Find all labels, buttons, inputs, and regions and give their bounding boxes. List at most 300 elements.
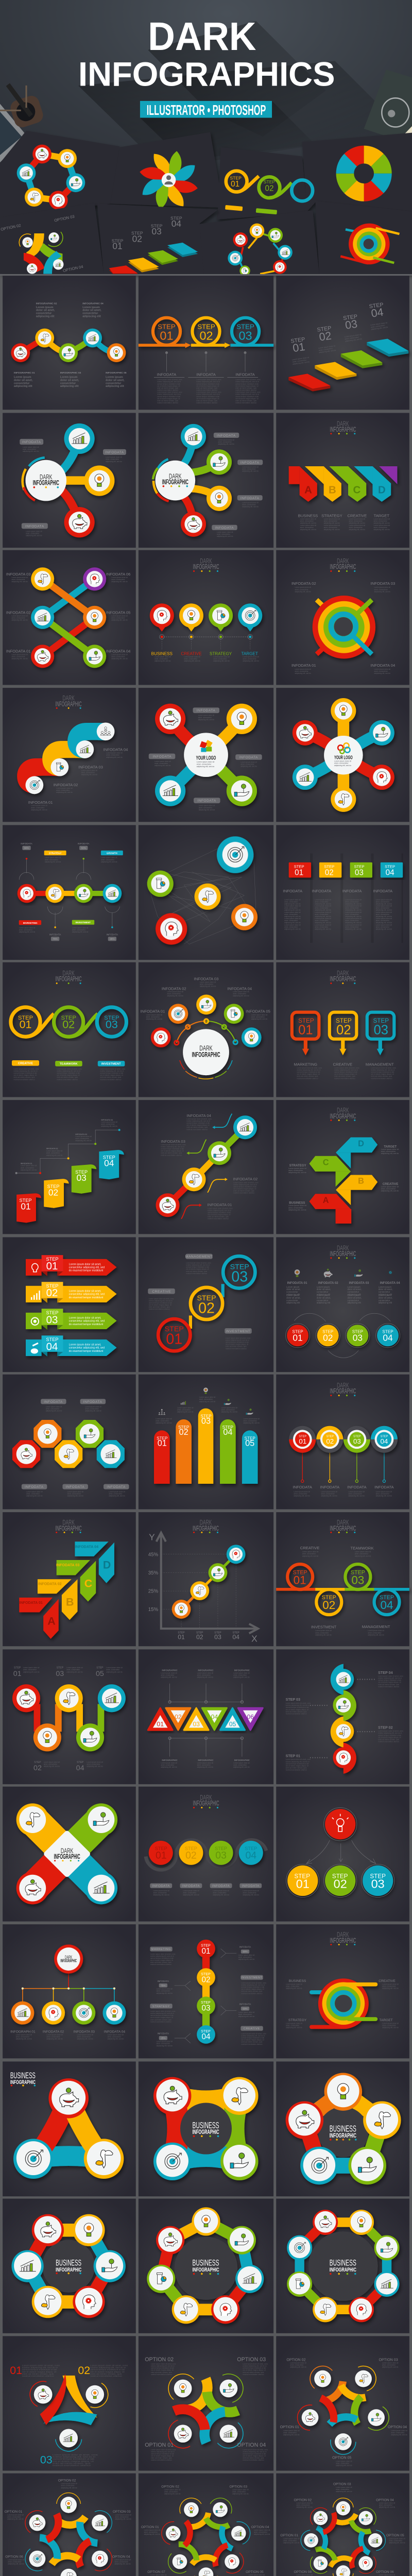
panel: four balls with curved arrows: 01 <box>293 1332 303 1343</box>
labels <box>294 1062 396 1079</box>
step labels: 04 <box>370 306 384 320</box>
hub title: INFOGRAPHIC <box>33 479 59 487</box>
panel: vertical crescents <box>276 1649 409 1784</box>
mockup: steps: STEP <box>112 238 124 243</box>
labels <box>288 1145 399 1211</box>
rings <box>310 1978 377 2029</box>
subtitle banner: ILLUSTRATOR • PHOTOSHOP <box>147 102 266 118</box>
bar icons <box>158 1387 253 1415</box>
pills: MANAGEMENT <box>185 1255 213 1259</box>
step numbers: 03 <box>374 1023 388 1038</box>
axis labels: 35% <box>148 1570 159 1576</box>
callouts: INFODATA <box>49 934 61 936</box>
letters: INFODATA 04 <box>75 1545 98 1549</box>
hub title: DARK <box>169 472 182 480</box>
labels: OPTION 01 <box>145 2442 174 2448</box>
arrow text: 01 <box>46 1261 58 1272</box>
top title <box>60 1955 77 1963</box>
step numbers: STEP <box>298 1018 314 1024</box>
panel: folded arrows <box>276 1100 409 1234</box>
labels: OPTION 04 <box>251 2526 269 2529</box>
pills and percent labels: INFODATA <box>239 1946 251 1948</box>
mockup: ribbons and discs: OPTION 04 <box>62 264 84 273</box>
panel: octagons <box>3 1375 136 1509</box>
heading: INFOGRAPHIC <box>330 975 356 982</box>
labels: STRATEGY <box>210 651 232 656</box>
pills: INFODATA <box>239 756 258 759</box>
ribbons <box>289 466 397 502</box>
connector stairs: INFODATA 03 <box>75 1133 87 1136</box>
step text: STEP <box>245 1436 255 1440</box>
labels: STEP <box>96 1667 104 1670</box>
pills <box>148 1254 252 1350</box>
heading: INFOGRAPHIC <box>193 1524 219 1532</box>
labels: OPTION 05 <box>386 2534 404 2537</box>
heading: DARK <box>337 1381 349 1389</box>
hub title <box>192 1044 220 1058</box>
arrow text <box>46 1257 59 1352</box>
labels: INFODATA 03 <box>349 1281 369 1285</box>
labels: INFOGRAPHIC <box>234 1669 250 1671</box>
labels <box>286 1671 403 1771</box>
step numbers: 01 <box>20 1018 31 1030</box>
stems <box>301 1453 385 1482</box>
panel: four tags with columns: 04 <box>386 868 394 877</box>
letters: INFODATA 02 <box>38 1582 62 1586</box>
labels: BUSINESS <box>298 513 318 518</box>
labels: OPTION 02 <box>286 2358 306 2362</box>
mockup: pinwheel <box>139 150 198 210</box>
panel: ribbon tags stairs <box>3 1100 136 1234</box>
labels: INFOGRAPH 01 <box>10 2030 36 2033</box>
panel: four balls with curved arrows: STEP <box>292 1330 303 1334</box>
panel: three blade cycle <box>3 2336 136 2471</box>
arrow text: 04 <box>46 1341 58 1352</box>
panel: idea tree: 02 <box>334 1877 347 1891</box>
balls <box>149 1841 263 1865</box>
long shadows of title <box>78 21 410 168</box>
heading: INFOGRAPHIC <box>330 1937 356 1944</box>
rings <box>11 1007 126 1037</box>
idea bulb <box>332 1814 349 1832</box>
panel: four balls with curved arrows: STEP <box>382 1330 393 1334</box>
panel: half rings with stems: STEP <box>299 1435 306 1438</box>
labels: INFODATA 01 <box>287 1281 307 1285</box>
title: DARK <box>61 1847 74 1855</box>
discs <box>174 2380 237 2443</box>
step text: 03 <box>201 1417 211 1426</box>
info columns <box>154 351 261 404</box>
heading: INFOGRAPHIC <box>56 975 82 982</box>
letters <box>20 1545 111 1627</box>
pills: INFODATA <box>152 1885 170 1888</box>
step plates <box>288 339 408 392</box>
pins <box>150 603 262 632</box>
panel: idea tree: STEP <box>294 1873 310 1879</box>
heading: DARK <box>62 969 75 977</box>
step numbers: STEP <box>158 323 176 331</box>
panel: four balls on wave: STEP <box>155 1846 167 1851</box>
labels: OPTION 01 <box>141 2526 159 2529</box>
panel: four tags with columns: STEP <box>324 865 334 869</box>
panel: business square <box>139 2061 273 2196</box>
labels <box>291 581 396 674</box>
labels: INFODATA <box>320 1485 340 1489</box>
letters: D <box>378 485 386 496</box>
pills and percent labels: MARKETING <box>151 1948 171 1951</box>
cycle arcs <box>21 2492 117 2576</box>
heading <box>193 557 219 572</box>
pills: INFODATA <box>44 1400 63 1404</box>
labels <box>5 2479 131 2576</box>
discs <box>302 2370 385 2450</box>
pills: INFODATA <box>217 434 236 437</box>
labels <box>141 976 270 1020</box>
callouts: INFODATA <box>78 842 90 845</box>
step numbers: 02 <box>322 1599 335 1612</box>
labels: STEP <box>34 1761 41 1764</box>
step numbers: 03 <box>231 1269 248 1285</box>
heading <box>56 1519 82 1533</box>
labels: TEAMWORK <box>351 1546 374 1551</box>
block of rows 1-3 <box>3 276 409 685</box>
heading <box>193 1793 219 1808</box>
mockup: step rings <box>225 171 313 214</box>
center title: BUSINESS <box>192 2259 219 2268</box>
labels <box>286 1979 399 2029</box>
labels <box>145 2357 268 2461</box>
pills: INFODATA <box>212 1885 230 1888</box>
pills and percent labels: INVESTMENT <box>241 1976 262 1979</box>
step numbers: STEP <box>230 1263 249 1272</box>
callouts: 75% <box>53 938 58 940</box>
labels: OPTION 06 <box>5 2555 23 2558</box>
labels: CREATIVE <box>383 1182 398 1186</box>
labels: OPTION 02 <box>58 2479 76 2483</box>
step text <box>157 1414 255 1448</box>
axis labels: 25% <box>148 1589 159 1595</box>
pills <box>20 439 126 537</box>
letters: INFODATA 01 <box>20 1601 43 1605</box>
letters: A <box>323 1196 329 1205</box>
metaball triangle <box>13 2078 124 2179</box>
step numbers: 03 <box>351 1573 364 1586</box>
hub title: INFOGRAPHIC <box>162 478 188 486</box>
letters: D <box>103 1558 111 1571</box>
info columns: INFODATA <box>196 372 216 377</box>
panel: four balls on wave: 04 <box>245 1850 256 1861</box>
labels: OPTION 01 <box>5 2510 23 2514</box>
panel: four balls with curved arrows: STEP <box>352 1330 364 1334</box>
panel: business pentagon <box>276 2061 409 2196</box>
pills: INFODATA <box>25 524 44 528</box>
labels <box>298 513 390 531</box>
callouts: MARKETING <box>23 922 38 924</box>
subtitle banner <box>140 101 272 118</box>
metaball hexagon <box>11 2214 126 2318</box>
panel: your logo with six branches <box>276 688 409 822</box>
center title: INFOGRAPHIC <box>192 2129 219 2136</box>
heading <box>193 1519 219 1533</box>
mockup sheets bottom row <box>0 201 412 274</box>
pills and percent labels <box>150 1946 266 2047</box>
panel: vertical step balls: 03 <box>201 2004 211 2012</box>
heading <box>330 1244 356 1259</box>
wave <box>146 1840 266 1870</box>
labels: OPTION 04 <box>376 2498 394 2502</box>
heading: DARK <box>200 557 212 565</box>
center title: BUSINESS <box>56 2259 81 2268</box>
heading: INFOGRAPHIC <box>330 426 356 433</box>
info columns: INFODATA <box>157 372 177 377</box>
panel: vertical step balls: 01 <box>201 1947 211 1956</box>
labels: INFODATA 03 <box>161 1139 185 1144</box>
ribbon tags <box>16 1150 124 1223</box>
pills: INFODATA <box>197 709 215 713</box>
heading <box>330 557 356 572</box>
staircase <box>17 722 114 794</box>
metaball pentagon <box>286 2073 401 2184</box>
panel: hub with four branches <box>139 413 273 548</box>
parallelograms and arrows <box>19 1541 114 1639</box>
panel: your logo with four branches <box>139 688 273 822</box>
discs <box>166 2502 246 2576</box>
labels: INFODATA 02 <box>318 1281 338 1285</box>
letters: B <box>358 1176 364 1185</box>
panel: four tags with columns <box>276 825 409 960</box>
labels: CREATIVE <box>348 513 367 518</box>
labels <box>141 2485 270 2576</box>
panel: X shape <box>3 1787 136 1921</box>
heading: DARK <box>62 1519 75 1527</box>
heading: DARK <box>337 1519 349 1527</box>
labels: TARGET <box>374 513 389 518</box>
heading: INFOGRAPHIC <box>10 2079 36 2086</box>
pills: INFODATA <box>22 440 41 444</box>
callouts <box>19 842 123 941</box>
step text: STEP <box>178 1425 190 1430</box>
step numbers: STEP <box>165 1325 184 1333</box>
labels: 04 <box>76 1764 84 1772</box>
mockup: steps: 01 <box>112 241 123 251</box>
center title <box>330 2124 357 2141</box>
labels <box>161 1669 250 1768</box>
blades <box>315 2379 373 2435</box>
step numbers: STEP <box>18 1015 33 1021</box>
panel: vertical step balls: 02 <box>201 1975 211 1984</box>
axis labels: 01 <box>178 1634 185 1641</box>
panel: four tags with columns: STEP <box>385 865 395 869</box>
heading <box>330 1519 356 1533</box>
blades <box>29 2374 97 2445</box>
pills: INFODATA <box>242 1885 260 1888</box>
title <box>54 1847 80 1861</box>
logo: YOUR LOGO <box>196 755 216 761</box>
labels: OPTION 04 <box>237 2442 266 2448</box>
chart nodes <box>172 1545 246 1619</box>
logo <box>196 740 216 768</box>
labels: INFOGRAPHIC <box>162 1669 178 1671</box>
arrow text: 02 <box>46 1287 58 1299</box>
step numbers: STEP <box>373 1018 389 1024</box>
axis labels: STEP <box>178 1631 185 1634</box>
labels <box>286 1281 400 1304</box>
block of rows 13-14 <box>3 1924 409 2196</box>
labels: INFODATA <box>293 1485 313 1489</box>
axes <box>157 1533 258 1633</box>
step numbers <box>293 1570 394 1612</box>
panel: four balls on wave <box>139 1787 273 1921</box>
labels: INFODATA 03 <box>371 581 395 586</box>
center title: INFOGRAPHIC <box>192 2267 219 2273</box>
step text: 04 <box>211 1714 218 1721</box>
arrow text: STEP <box>46 1283 59 1289</box>
panel: idea tree: 01 <box>296 1877 310 1891</box>
labels: INFODATA 02 <box>291 581 316 586</box>
connector stairs: INFODATA 02 <box>46 1148 58 1150</box>
labels: INFODATA 04 <box>371 663 396 668</box>
mockup: steps: 04 <box>171 218 181 229</box>
panel: ribbon staircase <box>3 688 136 822</box>
pills and percent labels: 25% <box>161 2037 165 2040</box>
labels <box>151 651 258 656</box>
step text: 02 <box>175 1714 182 1721</box>
mockup: step rings: 02 <box>265 184 273 193</box>
panel: four balls on wave: STEP <box>215 1846 227 1851</box>
metaball octagon <box>287 2210 400 2322</box>
labels: OPTION 01 <box>280 2534 298 2537</box>
bottom arcs <box>180 1060 232 1079</box>
heading: INFOGRAPHIC <box>330 1250 356 1258</box>
panel: four tags with columns: STEP <box>354 865 364 869</box>
step numbers: 02 <box>336 1023 351 1038</box>
labels: 03 <box>40 2453 53 2466</box>
labels: 01 <box>13 1670 22 1678</box>
heading <box>330 969 356 984</box>
balls <box>286 1808 394 1897</box>
block of rows 15-17 <box>3 2199 409 2576</box>
labels: MANAGEMENT <box>366 1062 394 1066</box>
panel: vertical step balls: STEP <box>201 2029 211 2033</box>
panel: triangles row <box>139 1649 273 1784</box>
hub title <box>33 473 59 488</box>
pills: INFODATA <box>182 1885 200 1888</box>
labels: STEP 04 <box>378 1671 393 1675</box>
panel: four blade cycle <box>139 2336 273 2471</box>
labels <box>13 1667 104 1772</box>
panel: vertical step balls: STEP <box>201 1972 211 1976</box>
letters: C <box>84 1578 92 1590</box>
blades <box>174 2510 237 2573</box>
logo <box>334 743 353 767</box>
labels: OPTION 03 <box>333 2483 351 2486</box>
panel: four tags with columns: STEP <box>294 865 304 869</box>
callouts: INFODATA <box>21 842 33 845</box>
heading: DARK <box>200 1519 212 1527</box>
step numbers: 04 <box>381 1599 393 1612</box>
connector stairs: INFODATA 04 <box>101 1119 113 1121</box>
pills <box>212 433 263 537</box>
labels: INFODATA 03 <box>194 976 218 981</box>
labels <box>293 1485 394 1497</box>
pills: INFODATA <box>152 755 171 758</box>
pills: INFODATA <box>197 799 216 803</box>
labels <box>280 2358 407 2466</box>
pills <box>12 1060 125 1080</box>
labels: INFOGRAPHIC <box>198 1669 214 1671</box>
heading: DARK <box>337 1107 349 1114</box>
rings <box>139 318 273 348</box>
frames <box>292 1012 394 1055</box>
labels: INFOGRAPHIC <box>234 1759 250 1761</box>
step numbers: STEP <box>197 1294 216 1302</box>
heading: DARK <box>337 1931 349 1939</box>
arrow 2 <box>26 1282 117 1303</box>
step text <box>157 1714 254 1727</box>
labels: INFODATA <box>312 889 332 893</box>
bars <box>154 1409 258 1484</box>
labels: STEP 03 <box>286 1698 300 1702</box>
labels: INFODATA 04 <box>186 1113 212 1118</box>
labels: CREATIVE <box>379 1979 396 1983</box>
panel: vertical step balls: 04 <box>201 2032 211 2041</box>
letters <box>323 1139 364 1205</box>
panel: four node horizontal with callouts <box>3 825 136 960</box>
panel: ribbon tags stairs: 02 <box>48 1187 58 1197</box>
labels: BUSINESS <box>289 1201 305 1205</box>
cycle arcs <box>26 2377 113 2452</box>
X arms <box>16 1803 117 1904</box>
labels: INFODATA 04 <box>227 986 252 991</box>
pills and percent labels: CREATIVE <box>244 2027 260 2030</box>
cycle arcs <box>300 2497 386 2576</box>
heading <box>330 1931 356 1945</box>
labels <box>280 2483 405 2576</box>
step text: 03 <box>193 1720 200 1727</box>
rings <box>313 596 375 658</box>
panel: network nodes <box>139 825 273 960</box>
labels: INFODATA 03 <box>78 765 103 770</box>
step numbers: STEP <box>61 1015 76 1021</box>
branches and nodes <box>155 704 257 806</box>
serpentine <box>12 1684 126 1751</box>
labels: BUSINESS <box>289 1979 306 1983</box>
arrows <box>306 1840 376 1863</box>
step text: STEP <box>222 1425 234 1430</box>
pills and percent labels: INFODATA <box>158 1980 169 1982</box>
heading <box>10 2071 36 2087</box>
labels: INFODATA <box>347 1485 367 1489</box>
axis labels: STEP <box>233 1631 239 1634</box>
center title: INFOGRAPHIC <box>56 2267 81 2273</box>
heading: INFOGRAPHIC <box>330 1112 356 1120</box>
labels: OPTION 04 <box>112 2555 130 2558</box>
panel: vertical step balls: STEP <box>201 1943 211 1947</box>
step numbers: 01 <box>294 1573 306 1586</box>
tags <box>289 862 403 877</box>
chain labels: INFOGRAPHIC 03 <box>60 371 81 375</box>
network nodes <box>147 836 258 945</box>
pills: CREATIVE <box>152 1290 171 1294</box>
mockup: steps: STEP <box>170 216 182 221</box>
step numbers <box>158 323 254 343</box>
pills and percent labels: 50% <box>243 2007 248 2010</box>
axis labels: Y <box>149 1532 155 1543</box>
step numbers: 01 <box>160 329 174 343</box>
panel: business heptagon <box>139 2199 273 2333</box>
panel: four tags with columns: 02 <box>325 868 334 877</box>
labels: INFODATA 06 <box>106 572 130 577</box>
